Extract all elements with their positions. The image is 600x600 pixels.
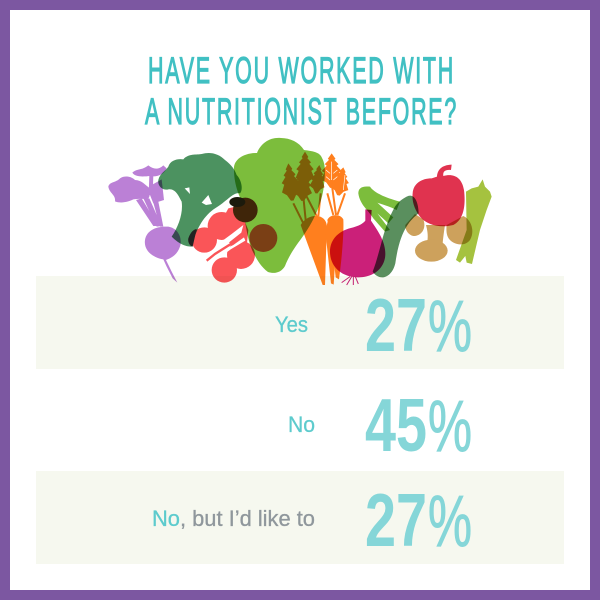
panel: No, but I'd like to row: % xyxy=(428,482,472,562)
panel: Yes row: Yes xyxy=(275,312,308,337)
icon: zucchini xyxy=(373,196,419,277)
icon: bell pepper xyxy=(412,165,465,226)
icon: tomato on lettuce xyxy=(249,224,277,252)
icon: red onion xyxy=(330,209,385,285)
icon: potatoes xyxy=(405,214,472,262)
icon: asparagus xyxy=(456,179,492,264)
icon: broccoli xyxy=(158,153,242,247)
illustration: vegetables xyxy=(108,138,492,285)
panel: Yes row xyxy=(36,276,564,369)
icon: green stalks xyxy=(358,186,400,232)
title xyxy=(145,50,458,132)
panel: No, but I'd like to row: 27 xyxy=(365,478,427,562)
panel: No row: % xyxy=(428,387,472,467)
icon: lettuce xyxy=(234,138,325,273)
icon: carrots xyxy=(279,152,352,285)
icon: tomatoes xyxy=(192,206,255,283)
panel: No row: 45 xyxy=(365,383,427,467)
panel: No row xyxy=(288,383,472,467)
panel: Yes row: 27 xyxy=(365,283,427,367)
panel: No, but I'd like to row: No, but I’d like to xyxy=(152,506,315,531)
panel: No, but I'd like to row xyxy=(36,471,564,564)
panel: Yes row: % xyxy=(428,287,472,367)
icon: beet xyxy=(108,165,181,283)
icon: dark tomato xyxy=(188,197,258,247)
panel: No row: No xyxy=(288,412,315,437)
